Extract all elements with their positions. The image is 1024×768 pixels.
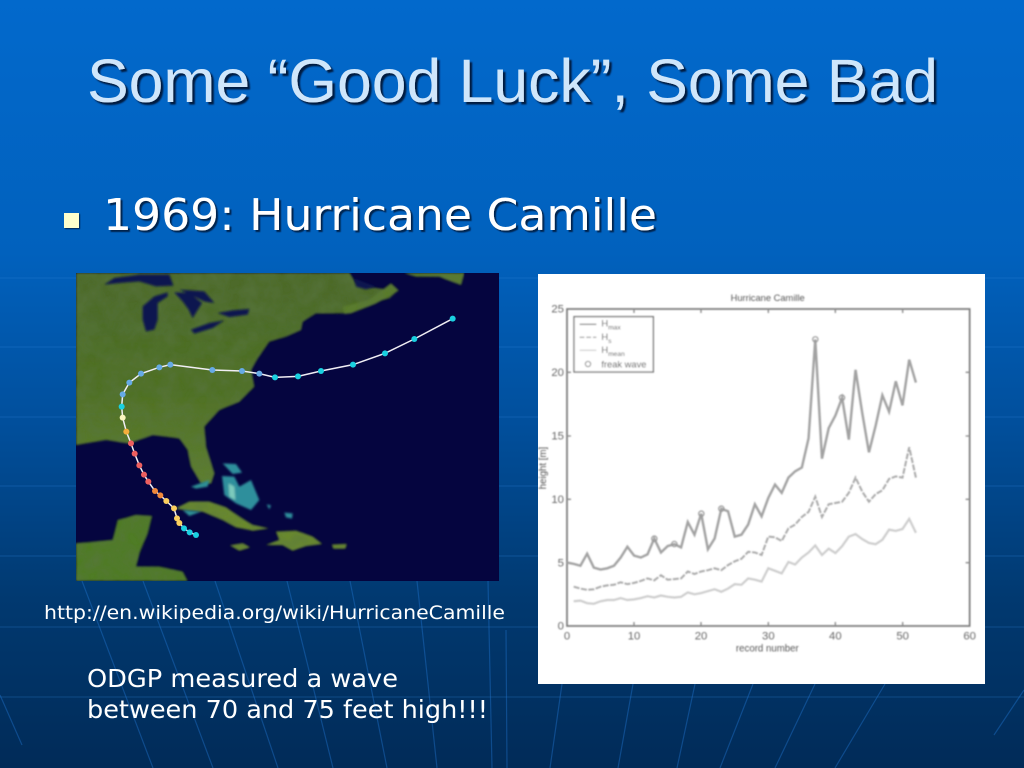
x axis labels <box>564 631 976 643</box>
chart legend: H <box>601 345 608 355</box>
map land: Hispaniola <box>266 531 322 551</box>
map land: Yucatan and Central America <box>76 515 188 581</box>
y axis labels: 10 <box>551 494 564 506</box>
series: Hmax <box>567 339 916 570</box>
y axis labels: 5 <box>558 557 564 569</box>
x axis labels: 0 <box>564 631 570 643</box>
map source link: http://en.wikipedia.org/wiki/HurricaneCamille <box>44 602 505 624</box>
chart legend: max <box>608 325 621 332</box>
bullet: Hurricane Camille <box>64 190 657 241</box>
chart legend: H <box>601 332 608 342</box>
x axis labels: 50 <box>896 631 909 643</box>
x axis labels: 60 <box>963 631 976 643</box>
map shallows: Bahamas <box>222 463 293 519</box>
x axis labels: 20 <box>695 631 707 643</box>
x axis labels: 30 <box>762 631 775 643</box>
map lakes: Great Lakes <box>104 275 376 334</box>
line chart: Hurricane Camille wave height <box>538 274 985 684</box>
track markers <box>119 316 456 538</box>
map: Hurricane Camille track <box>76 273 499 581</box>
x axis labels: 10 <box>628 631 640 643</box>
chart title: Hurricane Camille <box>731 293 805 303</box>
map shallows: Florida Keys and Cuba coast <box>183 480 209 516</box>
chart legend: s <box>608 338 612 345</box>
chart legend: freak wave <box>601 360 646 370</box>
y axis labels: 25 <box>551 304 564 316</box>
map land: Nova Scotia and Newfoundland <box>343 273 464 314</box>
track line <box>122 319 453 535</box>
freak wave markers <box>652 337 845 547</box>
series lines <box>567 339 916 604</box>
x axis title: record number <box>736 644 800 655</box>
callout: ODGP wave measurement <box>87 664 488 724</box>
y axis labels <box>551 304 564 633</box>
map land: Cuba <box>176 502 269 531</box>
y axis labels: 20 <box>551 367 564 379</box>
map land: Jamaica and Puerto Rico <box>230 543 347 551</box>
callout: ODGP wave measurement: between 70 and 75 feet high!!! <box>87 695 488 724</box>
series: Hs <box>574 447 916 590</box>
bullet marker <box>64 213 79 228</box>
plot frame and ticks <box>567 309 970 626</box>
bullet text: 1969: Hurricane Camille <box>103 190 657 241</box>
x axis labels: 40 <box>829 631 842 643</box>
chart legend <box>574 317 653 372</box>
y axis title: height [m] <box>538 447 549 489</box>
y axis labels: 15 <box>551 431 564 443</box>
series: Hmean <box>574 519 916 604</box>
chart legend: H <box>601 319 608 329</box>
y axis labels: 0 <box>558 621 564 633</box>
chart legend: mean <box>608 351 625 358</box>
map land: North America <box>76 273 464 581</box>
callout: ODGP wave measurement: ODGP measured a wave <box>87 664 398 693</box>
title: Some “Good Luck”, Some Bad <box>87 47 938 115</box>
